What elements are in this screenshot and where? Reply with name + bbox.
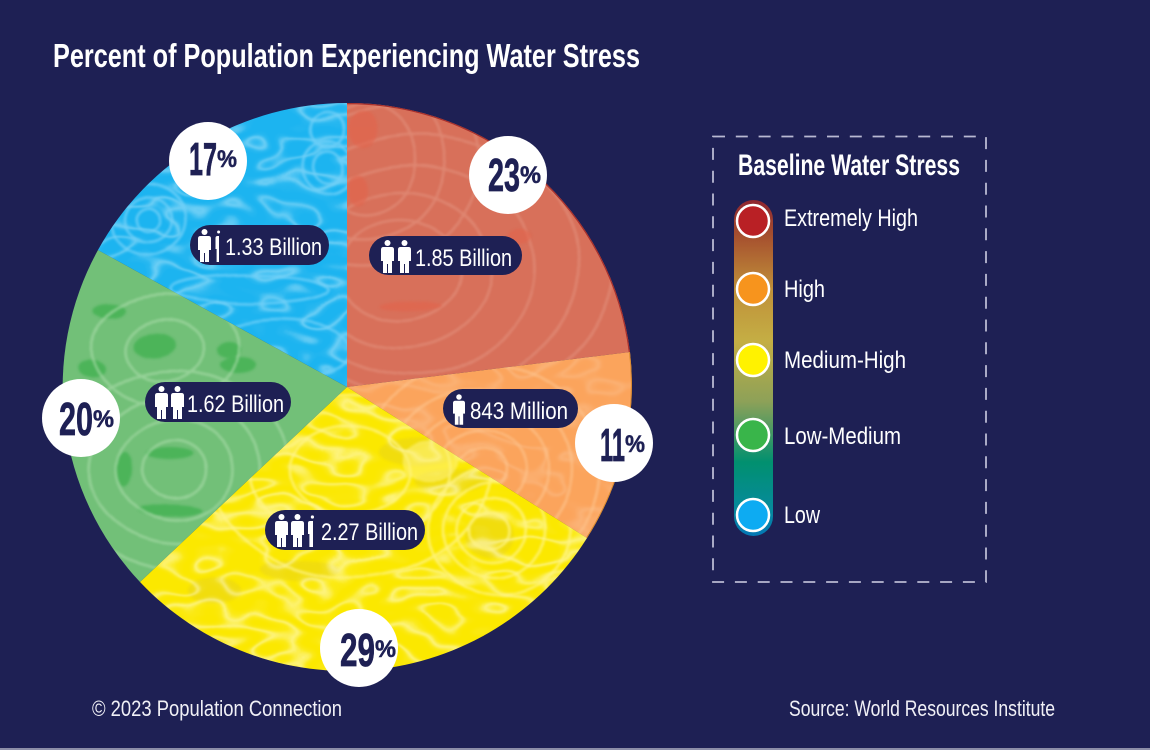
legend heading: Baseline Water Stress [738, 149, 960, 182]
slice: medium-high 29% [140, 387, 587, 670]
badge: 20% [42, 379, 120, 457]
population pill: 1.62 Billion: 1.62 Billion [187, 391, 284, 418]
legend panel [713, 136, 986, 582]
population pill: 1.85 Billion [369, 236, 522, 275]
badge: 11%: % [625, 431, 645, 458]
badge: 20%: 20 [59, 393, 93, 445]
population pill: 2.27 Billion: 2.27 Billion [321, 519, 418, 546]
slice: low-medium 20% [55, 245, 350, 590]
population pill: 1.85 Billion: 1.85 Billion [415, 245, 512, 272]
legend gradient bar [734, 200, 773, 536]
population pill: 2.27 Billion [265, 510, 425, 550]
badge: 17%: 17 [189, 133, 217, 185]
source footer: Source: World Resources Institute [789, 696, 1055, 721]
pie chart [62, 103, 632, 670]
copyright footer: © 2023 Population Connection [92, 696, 342, 721]
badge: 17%: % [217, 146, 237, 173]
population pill: 1.33 Billion: 1.33 Billion [225, 234, 322, 261]
legend item: low: Low [784, 502, 821, 529]
legend item: medium-high [737, 344, 906, 376]
legend item: high: High [784, 276, 825, 303]
badge: 29% [320, 609, 398, 687]
slice: extremely high 23% [347, 103, 630, 387]
legend item: low [737, 499, 821, 531]
badge: 29%: % [375, 636, 396, 663]
population pill: 843 Million [443, 389, 578, 428]
population pill: 843 Million: 843 Million [470, 398, 568, 425]
legend item: low-medium: Low-Medium [784, 423, 901, 450]
badge: 20%: % [93, 406, 114, 433]
legend item: high [737, 273, 825, 305]
slice: low 17% [98, 103, 347, 387]
badge: 11%: 11 [600, 419, 625, 471]
badge: 29%: 29 [340, 624, 375, 676]
population pill: 1.62 Billion [145, 382, 291, 422]
title: Percent of Population Experiencing Water Stress [53, 37, 640, 74]
legend item: medium-high: Medium-High [784, 347, 906, 374]
population pill: 1.33 Billion [190, 225, 329, 265]
badge: 23%: % [520, 162, 541, 189]
badge: 11% [575, 404, 653, 482]
legend item: extremely high [737, 205, 918, 237]
slice: high 11% [347, 352, 632, 538]
badge: 17% [169, 122, 247, 200]
legend item: low-medium [737, 419, 901, 451]
legend dashed border [713, 136, 986, 582]
badge: 23% [469, 136, 547, 214]
legend item: extremely high: Extremely High [784, 205, 918, 232]
badge: 23%: 23 [488, 149, 520, 201]
